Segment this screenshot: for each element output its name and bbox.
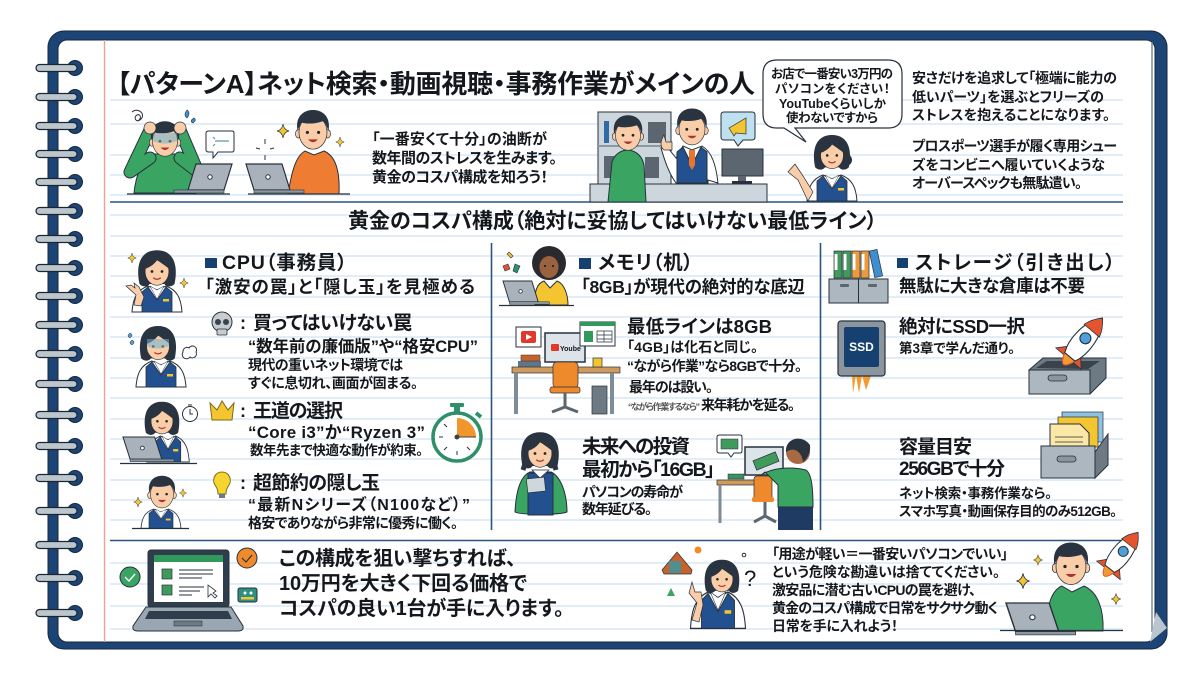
icon: light bulb bbox=[214, 472, 230, 498]
illustration: woman at laptop bbox=[499, 246, 574, 306]
royal road text: 数年先まで快適な動作が約束。 bbox=[250, 442, 423, 458]
intro text: 黄金のコスパ構成を知ろう！ bbox=[372, 168, 548, 186]
panel: CPU bbox=[120, 250, 481, 531]
CPU heading: 「激安の罠」と「隠し玉」を見極める bbox=[205, 277, 475, 297]
memory future text: 数年延びる。 bbox=[582, 501, 652, 517]
storage heading: ストレージ（引き出し） bbox=[915, 252, 1115, 274]
capacity text: 容量目安 bbox=[899, 436, 972, 458]
storage heading: 無駄に大きな倉庫は不要 bbox=[899, 276, 1085, 296]
male staff bbox=[661, 108, 718, 183]
counter bbox=[590, 184, 767, 202]
megaphone bubble bbox=[721, 112, 755, 146]
intro text: 「一番安くて十分」の油断が bbox=[372, 130, 547, 148]
capacity text: スマホ写真・動画保存目的のみ512GB。 bbox=[899, 503, 1117, 519]
right side note: ストレスを抱えることになります。 bbox=[912, 107, 1110, 123]
memory future text: パソコンの寿命が bbox=[582, 484, 683, 500]
royal road text bbox=[240, 400, 425, 458]
illustration: happy man with rocket bbox=[1000, 523, 1150, 635]
trap text: : bbox=[240, 313, 246, 333]
memory minimum text: 最年のは設い。 bbox=[629, 379, 713, 395]
illustration: clerk at laptop with timer bbox=[120, 402, 198, 464]
intro text bbox=[372, 130, 557, 186]
royal road text: 王道の選択 bbox=[253, 400, 343, 422]
illustration: woman with tablet bbox=[515, 432, 567, 515]
right side note: 低いパーツ」を選ぶとフリーズの bbox=[912, 89, 1104, 105]
illustration: happy man with laptop bbox=[246, 110, 350, 194]
memory minimum text: 最低ラインは8GB bbox=[627, 316, 772, 337]
closing text: 黄金のコスパ構成で日常をサクサク動く bbox=[772, 600, 998, 616]
memory minimum text: “ながら作業するなら” bbox=[628, 401, 700, 412]
closing text: という危険な勘違いは捨ててください。 bbox=[772, 564, 1000, 580]
memory minimum text: “ながら作業”なら8GBで十分。 bbox=[627, 358, 802, 374]
hidden gem text: 超節約の隠し玉 bbox=[253, 472, 380, 494]
memory heading: 「8GB」が現代の絶対的な底辺 bbox=[581, 277, 806, 297]
hidden gem text: 格安でありながら非常に優秀に働く。 bbox=[248, 515, 458, 531]
speech bubble: 使わないですから bbox=[786, 110, 878, 125]
capacity text: ネット検索・事務作業なら。 bbox=[899, 485, 1052, 501]
illustration: rocket in drawer bbox=[1029, 307, 1115, 394]
customer bbox=[608, 115, 646, 202]
right side note: 安さだけを追求して「極端に能力の bbox=[912, 70, 1117, 86]
illustration: clerk with clasped hands bbox=[132, 476, 189, 528]
memory heading bbox=[579, 252, 806, 297]
closing text: 「用途が軽い＝一番安いパソコンでいい」 bbox=[772, 546, 1008, 562]
hidden gem text: : bbox=[240, 473, 246, 493]
closing text bbox=[772, 546, 1008, 634]
illustration: desk with monitor: Yoube bbox=[560, 346, 581, 353]
spiral binding rings bbox=[36, 60, 82, 620]
hidden gem text bbox=[240, 472, 470, 531]
SSD text bbox=[899, 316, 1025, 356]
icon: stopwatch bbox=[433, 403, 481, 461]
illustration: frustrated man with slow laptop bbox=[127, 110, 234, 194]
speech bubble bbox=[763, 60, 902, 142]
illustration: clerk with question: ? bbox=[744, 566, 756, 591]
female staff bbox=[788, 135, 857, 201]
trap text: 買ってはいけない罠 bbox=[253, 312, 412, 334]
summary text: この構成を狙い撃ちすれば、 bbox=[279, 546, 516, 570]
section heading: 黄金のコスパ構成（絶対に妥協してはいけない最低ライン） bbox=[348, 209, 877, 233]
right side note: オーバースペックも無駄遣い。 bbox=[912, 175, 1082, 191]
trap text: “数年前の廉価版”や“格安CPU” bbox=[248, 336, 478, 356]
summary text: 10万円を大きく下回る価格で bbox=[279, 572, 527, 595]
icon: crown bbox=[210, 401, 234, 420]
illustration: desk with monitor bbox=[512, 322, 620, 414]
memory minimum text bbox=[627, 316, 802, 413]
memory future text: 未来への投資 bbox=[582, 436, 690, 458]
memory future text bbox=[582, 436, 715, 517]
illustration: tired clerk bbox=[128, 326, 197, 387]
royal road text: : bbox=[240, 401, 246, 421]
trap text: 現代の重いネット環境では bbox=[248, 357, 403, 373]
icon: SSD with flames bbox=[838, 321, 885, 393]
CPU heading bbox=[205, 252, 475, 297]
CPU heading: CPU（事務員） bbox=[222, 252, 347, 274]
illustration: clerk with question bbox=[662, 546, 756, 628]
memory minimum text: 来年耗かを延る。 bbox=[701, 397, 795, 413]
panel: summary bbox=[120, 523, 1150, 635]
icon: skull bbox=[212, 312, 232, 335]
intro text: 数年間のストレスを生みます。 bbox=[372, 149, 557, 167]
memory heading: メモリ（机） bbox=[598, 252, 693, 274]
closing text: 激安品に潜む古いCPUの罠を避け、 bbox=[772, 582, 976, 598]
SSD text: 絶対にSSD一択 bbox=[899, 316, 1025, 337]
capacity text: 256GBで十分 bbox=[899, 458, 1005, 480]
speech bubble: YouTubeくらいしか bbox=[779, 97, 887, 111]
right side note bbox=[912, 70, 1117, 191]
SSD text: 第3章で学んだ通り。 bbox=[899, 340, 1015, 356]
memory future text: 最初から「16GB」 bbox=[582, 459, 715, 481]
hidden gem text: “最新Nシリーズ（N100など）” bbox=[248, 495, 470, 514]
icon: SSD with flames: SSD bbox=[849, 340, 874, 354]
storage heading bbox=[897, 252, 1115, 296]
illustration: laptop checklist bbox=[133, 550, 243, 631]
trap text: すぐに息切れ、画面が固まる。 bbox=[248, 375, 418, 391]
panel: memory bbox=[499, 246, 813, 530]
illustration: man installing memory bbox=[717, 435, 813, 530]
closing text: 日常を手に入れよう！ bbox=[772, 618, 898, 634]
royal road text: “Core i3”か“Ryzen 3” bbox=[248, 423, 425, 442]
speech bubble: お店で一番安い3万円の bbox=[771, 66, 893, 81]
memory minimum text: 「4GB」は化石と同じ。 bbox=[627, 339, 758, 355]
summary text bbox=[279, 546, 564, 620]
right side note: プロスポーツ選手が履く専用シュー bbox=[912, 138, 1117, 154]
shelf bbox=[598, 112, 671, 184]
summary text: コスパの良い1台が手に入ります。 bbox=[279, 596, 564, 620]
capacity text bbox=[899, 436, 1117, 519]
speech bubble: パソコンをください！ bbox=[775, 82, 890, 96]
title: 【パターンA】ネット検索・動画視聴・事務作業がメインの人 bbox=[117, 69, 755, 99]
illustration: CPU clerk bbox=[126, 250, 188, 312]
monitor bbox=[722, 149, 763, 184]
illustration: binders and drawers bbox=[829, 249, 888, 303]
trap text bbox=[240, 312, 478, 391]
icons: check bubbles bbox=[120, 548, 257, 602]
illustration: file drawer bbox=[1041, 412, 1108, 478]
illustration: shop counter scene bbox=[590, 108, 857, 202]
right side note: ズをコンビニへ履いていくような bbox=[912, 157, 1105, 173]
panel: storage bbox=[829, 249, 1117, 519]
